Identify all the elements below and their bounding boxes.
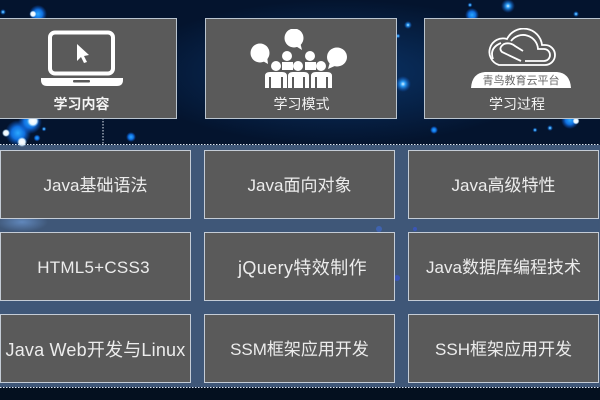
caption: 学习过程 [489, 96, 545, 112]
course: SSM框架应用开发: SSM框架应用开发 [230, 340, 369, 359]
course: Java数据库编程技术: Java数据库编程技术 [426, 258, 581, 277]
icon: group discussion [250, 29, 347, 88]
course: Java基础语法 [0, 150, 191, 219]
course: Java面向对象 [204, 150, 395, 219]
course: SSH框架应用开发 [408, 314, 599, 383]
course: Java面向对象: Java面向对象 [248, 176, 351, 195]
course: Java数据库编程技术 [408, 232, 599, 301]
dotted connectors [0, 118, 600, 388]
course: HTML5+CSS3 [0, 232, 191, 301]
icon: laptop with cursor [41, 30, 123, 86]
panel: 学习过程 [424, 18, 600, 119]
course: SSH框架应用开发: SSH框架应用开发 [435, 340, 572, 359]
panel: 学习内容 [0, 18, 177, 119]
course: Java高级特性 [408, 150, 599, 219]
course: SSM框架应用开发 [204, 314, 395, 383]
panel: 学习模式 [205, 18, 397, 119]
course: jQuery特效制作: jQuery特效制作 [238, 258, 367, 278]
course: Java基础语法: Java基础语法 [44, 176, 147, 195]
icon: cloud platform logo [471, 28, 571, 88]
caption: 学习内容 [54, 96, 110, 112]
course: HTML5+CSS3: HTML5+CSS3 [37, 258, 150, 277]
course: jQuery特效制作 [204, 232, 395, 301]
caption: 学习模式 [274, 96, 330, 112]
course: Java Web开发与Linux: Java Web开发与Linux [6, 340, 185, 360]
course: Java Web开发与Linux [0, 314, 191, 383]
icon: cloud platform logo: 青鸟教育云平台 [482, 73, 560, 87]
course: Java高级特性: Java高级特性 [452, 176, 555, 195]
